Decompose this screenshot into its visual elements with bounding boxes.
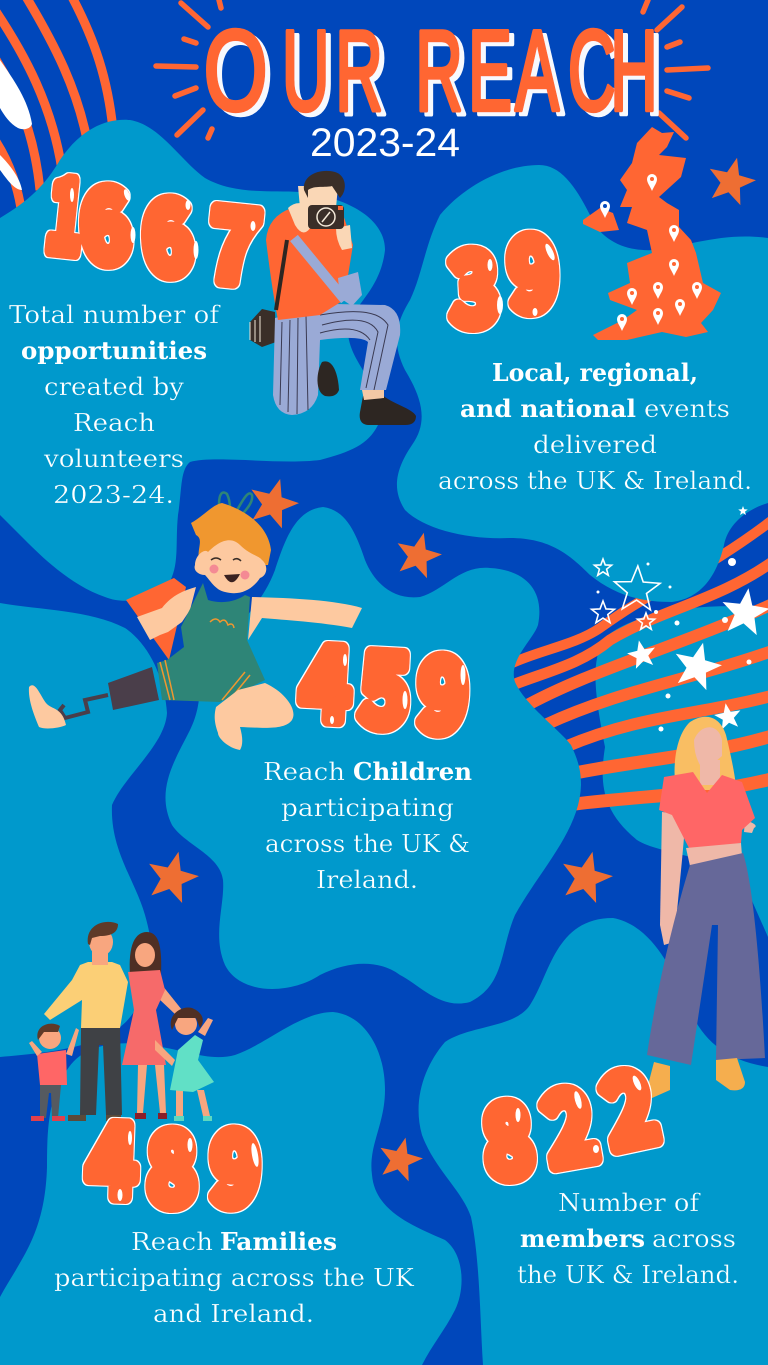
- title: [204, 7, 658, 135]
- number 1667: 1: [41, 137, 92, 282]
- description: opportunities: [9, 301, 221, 509]
- description: children: [263, 757, 472, 894]
- number 489: 4: [86, 1083, 139, 1226]
- description: opportunities: 2023-24.: [53, 481, 174, 509]
- white sparkle stars: [592, 506, 768, 732]
- panel blob: children: [165, 507, 581, 1004]
- figure: photographer: [250, 171, 416, 425]
- icon: star by child: [243, 472, 304, 531]
- description: opportunities: volunteers: [43, 445, 184, 473]
- number 459: [298, 605, 471, 760]
- title: C: [568, 7, 616, 134]
- description: families: participating across the UK: [54, 1264, 415, 1292]
- panel blob: right behind woman: [595, 606, 768, 937]
- number 1667: [41, 137, 266, 312]
- description: members: the UK & Ireland.: [517, 1261, 739, 1289]
- description: events: delivered: [533, 431, 657, 459]
- number 489: 9: [209, 1091, 262, 1234]
- description: children: Children: [353, 757, 472, 786]
- title: O: [204, 8, 268, 135]
- title: H: [610, 7, 658, 134]
- number 822: [476, 1029, 667, 1208]
- number 39: 9: [505, 195, 561, 339]
- description: families: Reach: [131, 1228, 213, 1256]
- description: opportunities: Reach: [73, 409, 155, 437]
- panel blob: members: [419, 918, 768, 1365]
- number 1667: 7: [202, 166, 266, 312]
- title: R: [335, 7, 401, 134]
- description: opportunities: Total number of: [9, 301, 221, 329]
- decorative stars: [142, 152, 760, 1183]
- icon: star centre top: [391, 527, 446, 580]
- title: E: [468, 7, 512, 134]
- icon: star left: [142, 846, 203, 905]
- title rays: [156, 0, 708, 138]
- description: opportunities: created by: [44, 373, 184, 401]
- description: children: participating: [281, 794, 454, 822]
- description: families: [54, 1227, 415, 1328]
- icon: star right: [556, 846, 617, 905]
- panel blob: families: [0, 1012, 462, 1365]
- number highlights: [516, 1074, 643, 1153]
- panel blob: events: [397, 165, 768, 602]
- stat: 459 children: [263, 605, 472, 894]
- number highlights: [488, 243, 557, 316]
- panel blob: opportunities: [0, 120, 385, 601]
- description: members: Number of: [558, 1189, 701, 1217]
- figure: woman: [645, 717, 765, 1098]
- number 822: 2: [589, 1029, 667, 1177]
- description: children: across the UK &: [265, 830, 470, 858]
- description: members: across: [652, 1225, 736, 1253]
- number 459: 9: [415, 616, 471, 760]
- description: families: Families: [220, 1227, 337, 1256]
- number highlights: [330, 654, 466, 724]
- number highlights: [118, 1131, 260, 1201]
- number 39: 3: [446, 210, 502, 354]
- number 1667: 6: [138, 159, 196, 304]
- description: children: Ireland.: [316, 866, 418, 894]
- description: events: across the UK & Ireland.: [438, 467, 752, 495]
- title: U: [282, 7, 330, 134]
- subtitle year: 2023-24: [310, 121, 460, 165]
- number 39: [446, 195, 561, 354]
- stat: 822 members: [476, 1029, 739, 1289]
- description: events: Local, regional,: [492, 358, 698, 387]
- number highlights: [70, 188, 256, 259]
- description: events: events: [644, 395, 730, 423]
- description: opportunities: opportunities: [21, 336, 207, 365]
- icon: UK and Ireland map: [583, 127, 721, 340]
- description: events: [438, 358, 752, 495]
- number 459: 4: [298, 605, 354, 749]
- description: members: [517, 1189, 739, 1289]
- panel blob: left middle: [0, 603, 167, 1057]
- figure: jumping child: [29, 492, 362, 750]
- title: R: [415, 7, 463, 134]
- description: events: and national: [460, 394, 636, 423]
- icon: concentric stripes top left: [0, 0, 113, 215]
- flag stripes: [510, 518, 768, 804]
- title: A: [515, 7, 559, 134]
- number 489: 8: [148, 1091, 196, 1233]
- number 822: 2: [532, 1047, 606, 1195]
- number 489: [86, 1083, 262, 1234]
- number 459: 5: [357, 611, 413, 755]
- description: families: and Ireland.: [153, 1300, 314, 1328]
- stat: 1667 opportunities: [9, 137, 266, 509]
- description: children: Reach: [263, 758, 345, 786]
- icon: star by map: [703, 152, 760, 207]
- icon: star bottom: [374, 1132, 427, 1183]
- number 1667: 6: [76, 147, 134, 292]
- stat: 39 events: [438, 195, 752, 495]
- stat: 489 families: [54, 1083, 415, 1328]
- figure: family: [29, 922, 214, 1121]
- description: members: members: [520, 1224, 645, 1253]
- number 822: 8: [476, 1061, 539, 1208]
